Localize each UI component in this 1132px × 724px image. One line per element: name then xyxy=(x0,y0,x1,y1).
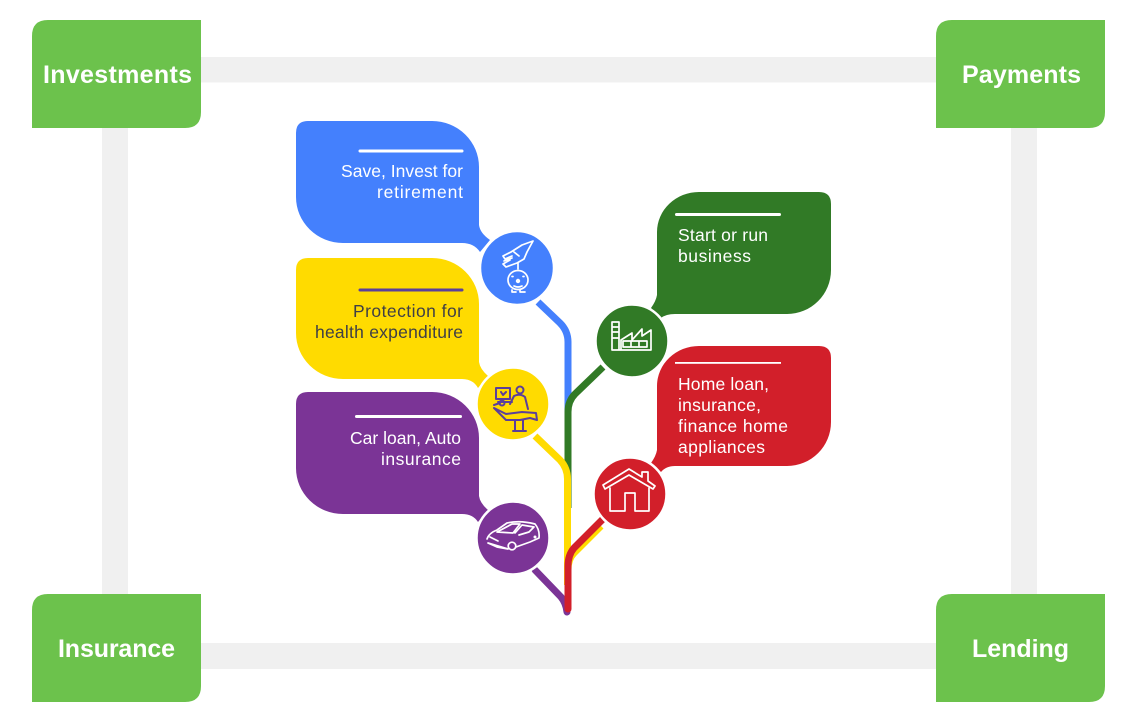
icon: hand and piggy bank xyxy=(480,231,554,305)
bubble: Home loan, insurance, finance home appliances: appliances xyxy=(678,437,765,457)
icon: patient and medical screen xyxy=(476,368,550,440)
box: Lending xyxy=(936,594,1105,702)
box: Lending: Lending xyxy=(972,635,1069,663)
bubble: Car loan, Auto insurance: Car loan, Auto xyxy=(350,428,461,448)
box: Payments: Payments xyxy=(962,61,1081,89)
bubble: Car loan, Auto insurance xyxy=(296,392,488,522)
box: Insurance xyxy=(32,594,201,702)
bubble: Car loan, Auto insurance: insurance xyxy=(381,449,461,469)
icon: car xyxy=(476,502,550,574)
bubble: Home loan, insurance, finance home appliances: Home loan, xyxy=(678,374,769,394)
bubble: Start or run business xyxy=(651,192,831,318)
box: Investments xyxy=(32,20,201,128)
bubble: Home loan, insurance, finance home appliances: finance home xyxy=(678,416,788,436)
bubble: Protection for health expenditure: Protection for xyxy=(353,301,463,321)
icon: factory xyxy=(596,304,668,378)
bubble: Start or run business: Start or run xyxy=(678,225,768,245)
box: Investments: Investments xyxy=(43,61,192,89)
bubble: Home loan, insurance, finance home appliances: insurance, xyxy=(678,395,761,415)
icon: house xyxy=(594,458,666,530)
tree branches xyxy=(535,302,604,612)
bubble: Save, Invest for retirement: Save, Invest for xyxy=(341,161,463,181)
bubble: Protection for health expenditure xyxy=(296,258,488,388)
bubble: Protection for health expenditure: health expenditure xyxy=(315,322,463,342)
box: Payments xyxy=(936,20,1105,128)
box: Insurance: Insurance xyxy=(58,635,175,663)
bubble: Save, Invest for retirement: retirement xyxy=(377,182,463,202)
bubble: Home loan, insurance, finance home appliances xyxy=(651,346,831,472)
bubble: Start or run business: business xyxy=(678,246,751,266)
bubble: Save, Invest for retirement xyxy=(296,121,490,252)
